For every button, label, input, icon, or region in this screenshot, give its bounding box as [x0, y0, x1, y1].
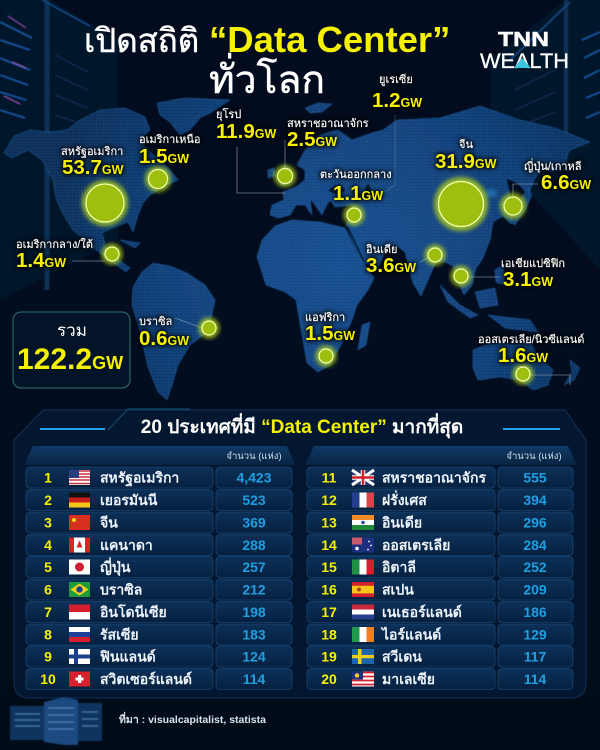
label: China: จีน	[458, 138, 473, 151]
row 2: 523	[242, 492, 266, 508]
row 19: 117	[524, 648, 547, 664]
row 17	[307, 602, 573, 622]
label: Eurasia: ยูเรเซีย	[379, 73, 413, 86]
row 2	[26, 490, 292, 510]
label: Eurasia	[372, 73, 422, 112]
row 9	[26, 646, 292, 667]
row 18: 129	[523, 626, 547, 642]
bubble: Australia	[512, 364, 534, 384]
row 17: 17	[321, 604, 337, 620]
row 11: 555	[523, 470, 547, 486]
row 8: รัสเซีย	[100, 626, 139, 642]
label: Europe	[216, 107, 277, 143]
row 12	[307, 490, 573, 510]
label: United Kingdom: 2.5GW	[287, 128, 337, 151]
label: Middle East: ตะวันออกกลาง	[320, 169, 392, 181]
label: India	[366, 243, 416, 277]
label: United States: 53.7GW	[62, 156, 124, 179]
row 4: แคนาดา	[100, 537, 153, 553]
bubble: Central and South America	[102, 244, 122, 264]
label: Brazil	[139, 316, 189, 350]
row 1: สหรัฐอเมริกา	[100, 470, 179, 488]
row 13: 13	[321, 514, 337, 530]
row 10: สวิตเซอร์แลนด์	[100, 671, 192, 687]
label: United States: สหรัฐอเมริกา	[61, 146, 123, 158]
label: Middle East	[320, 169, 392, 205]
row 5: ญี่ปุ่น	[100, 557, 131, 576]
bubble: Japan and Korea	[500, 193, 526, 219]
row 13: 296	[523, 514, 547, 530]
label: United Kingdom: สหราชอาณาจักร	[287, 118, 369, 130]
label: Africa: แอฟริกา	[305, 312, 345, 324]
label: Middle East: 1.1GW	[333, 182, 383, 205]
row 10: 114	[243, 671, 266, 687]
logo: TNN Wealth: WEALTH	[480, 50, 569, 73]
label: Australia and New Zealand	[478, 333, 584, 367]
label: India: อินเดีย	[366, 243, 397, 256]
label: Australia and New Zealand: 1.6GW	[498, 344, 548, 367]
bubble: China	[434, 177, 488, 231]
bubble: Middle East	[344, 204, 364, 226]
title: ทั่วโลก	[209, 53, 325, 102]
row 9: 124	[242, 648, 266, 664]
row 16: สเปน	[382, 582, 414, 598]
row 17: เนเธอร์แลนด์	[382, 604, 462, 620]
label: North America: อเมริกาเหนือ	[139, 133, 200, 146]
row 8: 8	[44, 626, 52, 642]
row 20: 20	[321, 671, 337, 687]
row 7	[26, 602, 292, 622]
row 4	[26, 534, 292, 556]
row 14: ออสเตรเลีย	[382, 537, 450, 553]
label: North America: 1.5GW	[139, 145, 189, 168]
row 11: สหราชอาณาจักร	[382, 470, 486, 486]
row 15	[307, 556, 573, 578]
panel heading: 20 ประเทศที่มี “Data Center” มากที่สุด	[141, 413, 463, 439]
row 10: 10	[40, 671, 56, 687]
row 6: 6	[44, 582, 52, 598]
row 16: 209	[523, 582, 547, 598]
row 4: 288	[242, 537, 266, 553]
total box: รวม	[57, 321, 87, 340]
label: China	[435, 138, 497, 173]
label: Central and South America: อเมริกากลาง/ใต้	[16, 238, 93, 251]
row 3: 3	[44, 514, 52, 530]
label: Eurasia: 1.2GW	[372, 89, 422, 112]
row 11	[307, 467, 573, 488]
row 20: 114	[524, 671, 547, 687]
label: Japan and Korea: 6.6GW	[541, 171, 591, 194]
row 19: สวีเดน	[382, 648, 422, 664]
total box	[13, 312, 130, 388]
row 18: 18	[321, 626, 337, 642]
right table header	[305, 446, 577, 465]
label: United States	[61, 146, 124, 179]
left table header	[24, 446, 295, 465]
row 6: 212	[242, 582, 266, 598]
row 6: บราซิล	[100, 582, 142, 598]
bubble: Africa	[316, 346, 336, 366]
title	[84, 19, 450, 102]
total box: 122.2GW	[17, 343, 123, 376]
row 15: อิตาลี	[381, 559, 416, 575]
label: Japan and Korea: ญี่ปุ่น/เกาหลี	[524, 158, 582, 173]
row 13: อินเดีย	[381, 514, 422, 530]
logo: TNN Wealth	[480, 29, 569, 73]
row 13	[307, 512, 573, 533]
label: China: 31.9GW	[435, 150, 497, 173]
icon: servers	[10, 697, 102, 745]
row 12: 12	[321, 492, 337, 508]
label: Asia Pacific	[501, 257, 565, 291]
bubble: United States	[82, 180, 128, 226]
label: United Kingdom	[287, 118, 369, 151]
label: Brazil: 0.6GW	[139, 327, 189, 350]
right table header: จำนวน (แห่ง)	[506, 451, 562, 462]
row 12: ฝรั่งเศส	[382, 490, 427, 508]
row 5	[26, 556, 292, 578]
row 2: เยอรมันนี	[100, 492, 158, 508]
label: Europe: 11.9GW	[216, 120, 277, 143]
row 15: 15	[321, 559, 337, 575]
label: Africa: 1.5GW	[305, 322, 355, 345]
row 20	[307, 668, 573, 690]
label: Africa	[305, 312, 355, 345]
label: Asia Pacific: เอเชียแปซิฟิก	[501, 257, 565, 270]
row 8: 183	[242, 626, 266, 642]
bubble: Brazil	[198, 318, 220, 338]
bubble: India	[424, 244, 446, 266]
row 8	[26, 624, 292, 645]
row 1: 4,423	[236, 470, 272, 486]
row 9: 9	[44, 648, 52, 664]
title: “Data Center”	[209, 19, 450, 60]
title: เปิดสถิติ	[84, 22, 199, 59]
row 16	[307, 579, 573, 600]
row 7: 198	[242, 604, 266, 620]
row 4: 4	[44, 537, 52, 553]
row 7: อินโดนีเซีย	[99, 603, 167, 620]
row 7: 7	[44, 604, 52, 620]
row 3: จีน	[99, 514, 118, 530]
row 19: 19	[321, 648, 337, 664]
row 15: 252	[523, 559, 547, 575]
label: Central and South America: 1.4GW	[16, 249, 66, 272]
row 16: 16	[321, 582, 337, 598]
label: Europe: ยุโรป	[216, 107, 241, 121]
label: Brazil: บราซิล	[139, 316, 172, 328]
server racks right	[490, 0, 600, 270]
row 12: 394	[523, 492, 547, 508]
row 17: 186	[523, 604, 547, 620]
world map	[4, 98, 590, 400]
row 3	[26, 512, 292, 533]
label: Australia and New Zealand: ออสเตรเลีย/นิวซีแลนด์	[478, 333, 584, 346]
row 6	[26, 579, 292, 600]
bubble: United Kingdom	[274, 165, 296, 187]
left table header: จำนวน (แห่ง)	[226, 451, 282, 462]
row 3: 369	[242, 514, 266, 530]
label: Japan and Korea	[524, 158, 591, 194]
row 2: 2	[44, 492, 52, 508]
row 5: 257	[242, 559, 266, 575]
row 9: ฟินแลนด์	[99, 648, 156, 664]
label: India: 3.6GW	[366, 254, 416, 277]
row 10	[26, 668, 292, 690]
row 20: มาเลเซีย	[382, 671, 435, 687]
label: Asia Pacific: 3.1GW	[503, 268, 553, 291]
row 11: 11	[322, 470, 337, 486]
label: North America	[139, 133, 200, 168]
logo: TNN Wealth: TNN	[498, 29, 549, 51]
row 1	[26, 467, 292, 488]
panel: top 20 countries	[14, 409, 586, 698]
row 5: 5	[44, 559, 52, 575]
row 18: ไอร์แลนด์	[380, 626, 441, 642]
row 14: 284	[523, 537, 547, 553]
bubble: North America	[145, 166, 171, 192]
row 19	[307, 646, 573, 667]
row 14	[307, 534, 573, 556]
leader lines	[72, 115, 570, 385]
row 14: 14	[321, 537, 337, 553]
server racks left	[0, 0, 118, 300]
row 1: 1	[44, 470, 52, 486]
bubble: Asia Pacific	[450, 266, 472, 286]
label: Central and South America	[16, 238, 93, 272]
source note: ที่มา : visualcapitalist, statista	[119, 711, 266, 726]
row 18	[307, 624, 573, 645]
